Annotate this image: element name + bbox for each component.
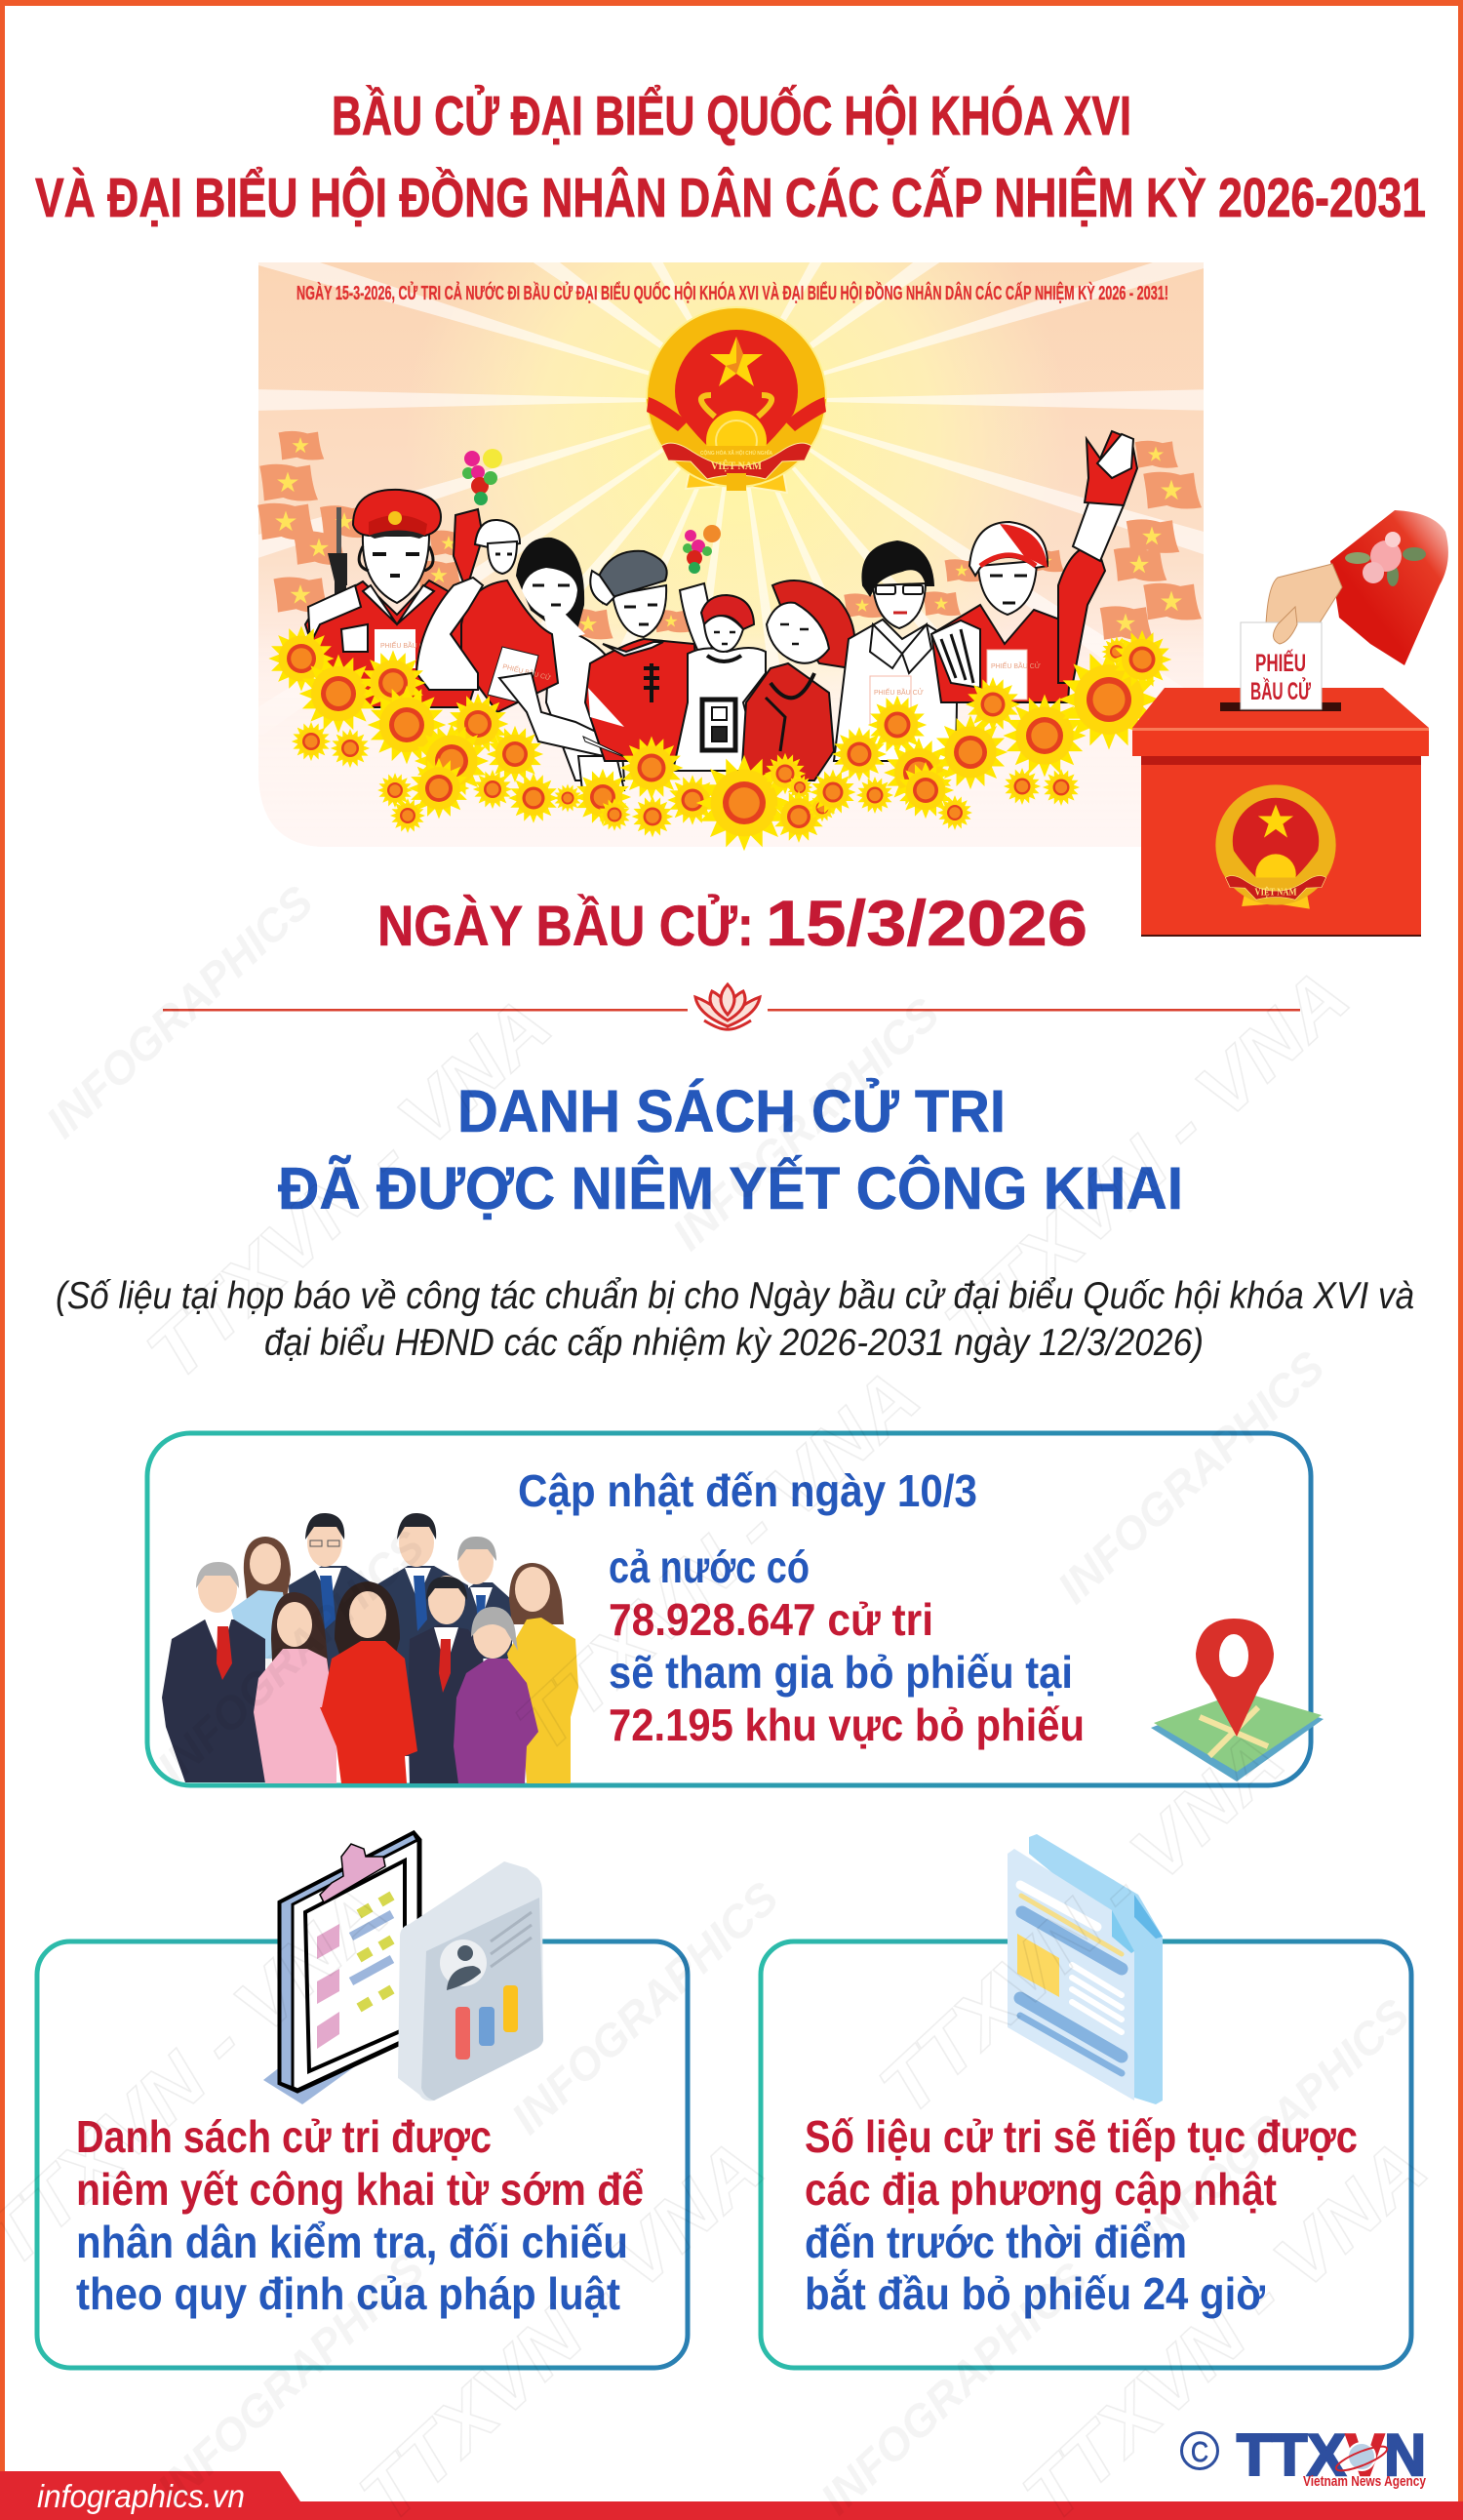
box lid (1132, 688, 1429, 756)
panel: continued updates (761, 1834, 1411, 2368)
watermarks: TTXVN - VNA outlines (0, 953, 1443, 2520)
source note (56, 1275, 1414, 1364)
poster: voters under national emblem (257, 262, 1204, 851)
ballot paper: BẦU CỬ (1250, 676, 1311, 705)
lid front (1132, 728, 1429, 756)
statistics text: 72.195 khu vực bỏ phiếu (609, 1700, 1085, 1750)
statistics text: sẽ tham gia bỏ phiếu tại (609, 1647, 1073, 1698)
lotus on sleeve (1345, 532, 1426, 586)
person: worker raising arm: PHIẾU BẦU CỬ (991, 660, 1041, 670)
slot (1220, 702, 1341, 711)
back woman in blue (231, 1537, 293, 1659)
national emblem: VIỆT NAM (711, 459, 762, 472)
box emblem (1215, 784, 1336, 909)
panel: public list (37, 1833, 688, 2368)
back man with glasses (289, 1513, 380, 1717)
icon: location pin on map (1151, 1619, 1324, 1781)
icon: lotus (695, 984, 760, 1029)
divider with lotus (163, 984, 1300, 1029)
statistics text (609, 1541, 1085, 1750)
flags background (257, 431, 1202, 640)
watermarks: INFOGRAPHICS: INFOGRAPHICS (1048, 1341, 1334, 1613)
watermarks: INFOGRAPHICS (36, 876, 1419, 2520)
footer website: infographics.vn (37, 2478, 245, 2514)
watermarks: TTXVN - VNA outlines: TTXVN - VNA (863, 1716, 1299, 2131)
watermarks: TTXVN - VNA outlines: TTXVN - VNA (499, 1353, 935, 1768)
person: soldier: PHIẾU BẦU CỬ (380, 640, 430, 650)
ballot box with hand (1132, 510, 1448, 937)
person: woman carrying child (416, 509, 624, 790)
panel text: đến trước thời điểm (805, 2217, 1187, 2267)
watermarks: INFOGRAPHICS: INFOGRAPHICS (1132, 1989, 1419, 2260)
watermarks: TTXVN - VNA outlines: TTXVN - VNA (929, 953, 1364, 1368)
icon: newspaper (1008, 1834, 1163, 2104)
back older man (457, 1537, 512, 1659)
election date (377, 887, 1087, 959)
title (35, 84, 1426, 229)
panel heading: Cập nhật đến ngày 10/3 (518, 1465, 977, 1516)
hand (1266, 564, 1342, 640)
watermarks: INFOGRAPHICS: INFOGRAPHICS (501, 1872, 788, 2143)
section heading (278, 1078, 1183, 1221)
woman in pink (254, 1592, 336, 1783)
watermarks: TTXVN - VNA outlines: TTXVN - VNA (131, 981, 567, 1396)
ballot paper: PHIẾU (1255, 649, 1306, 677)
source note: đại biểu HĐND các cấp nhiệm kỳ 2026-2031 ngày 12/3/2026) (264, 1322, 1204, 1364)
copyright mark: C (1191, 2437, 1208, 2468)
person: child in folk costume (673, 583, 766, 771)
icon: report sheet (398, 1861, 543, 2100)
panel text: Số liệu cử tri sẽ tiếp tục được (805, 2111, 1358, 2162)
agency name: Vietnam News Agency (1303, 2473, 1427, 2490)
section heading: DANH SÁCH CỬ TRI (457, 1078, 1006, 1144)
national emblem (647, 307, 826, 493)
sunflowers (268, 625, 1171, 851)
flowers bouquet: girl (683, 525, 721, 574)
panel text: nhân dân kiểm tra, đối chiếu (76, 2217, 628, 2267)
logo: TTXVN (1182, 2422, 1427, 2490)
back man (376, 1513, 468, 1756)
statistics text: cả nước có (609, 1541, 810, 1592)
person: man with glasses: PHIẾU BẦU CỬ (874, 687, 924, 697)
sleeve (1330, 510, 1448, 665)
watermarks: INFOGRAPHICS: INFOGRAPHICS (662, 988, 949, 1260)
title: BẦU CỬ ĐẠI BIỂU QUỐC HỘI KHÓA XVI (332, 84, 1131, 147)
thumb (1273, 607, 1297, 644)
person: ethnic woman (741, 580, 854, 780)
watermarks: INFOGRAPHICS: INFOGRAPHICS (147, 2243, 434, 2514)
illustration: group of voters (162, 1513, 578, 1783)
person: soldier (305, 490, 488, 707)
panel text (805, 2111, 1358, 2319)
watermarks: INFOGRAPHICS: INFOGRAPHICS (147, 1521, 434, 1792)
panel text: theo quy định của pháp luật (76, 2268, 620, 2319)
person: man in grey cap (583, 551, 698, 761)
watermarks: INFOGRAPHICS: INFOGRAPHICS (811, 2253, 1097, 2520)
globe mark (1333, 2442, 1390, 2475)
election date: NGÀY BẦU CỬ: (377, 895, 754, 958)
panel text: Danh sách cử tri được (76, 2111, 492, 2162)
panel: voter count (147, 1433, 1324, 1785)
icon: clipboard (263, 1833, 419, 2104)
section heading: ĐÃ ĐƯỢC NIÊM YẾT CÔNG KHAI (278, 1155, 1183, 1221)
statistics text: 78.928.647 cử tri (609, 1594, 933, 1645)
poster background with sun rays (258, 262, 1204, 847)
person: woman carrying child: PHIẾU BẦU CỬ (502, 660, 552, 682)
woman in yellow (507, 1563, 578, 1783)
panel text (76, 2111, 644, 2319)
box emblem: VIỆT NAM (1255, 886, 1297, 899)
flowers bouquet: child (462, 449, 502, 505)
panel text: niêm yết công khai từ sớm để (76, 2164, 644, 2215)
panel text: các địa phương cập nhật (805, 2164, 1277, 2215)
woman in red (320, 1581, 417, 1783)
person: worker raising arm (931, 431, 1137, 702)
copyright mark (1182, 2433, 1217, 2468)
national emblem: CỘNG HÒA XÃ HỘI CHỦ NGHĨA (700, 449, 772, 457)
footer band (0, 2471, 1463, 2520)
ballot paper (1241, 622, 1322, 709)
panel text: bắt đầu bỏ phiếu 24 giờ (805, 2268, 1265, 2319)
front man (408, 1576, 488, 1783)
election date: 15/3/2026 (766, 887, 1087, 959)
person: man with glasses (834, 541, 958, 761)
agency wordmark: TTXVN (1237, 2422, 1426, 2488)
front older man (162, 1562, 265, 1782)
box body (1141, 756, 1421, 935)
grandmother in purple (454, 1607, 538, 1783)
watermarks: INFOGRAPHICS: INFOGRAPHICS (36, 876, 323, 1147)
